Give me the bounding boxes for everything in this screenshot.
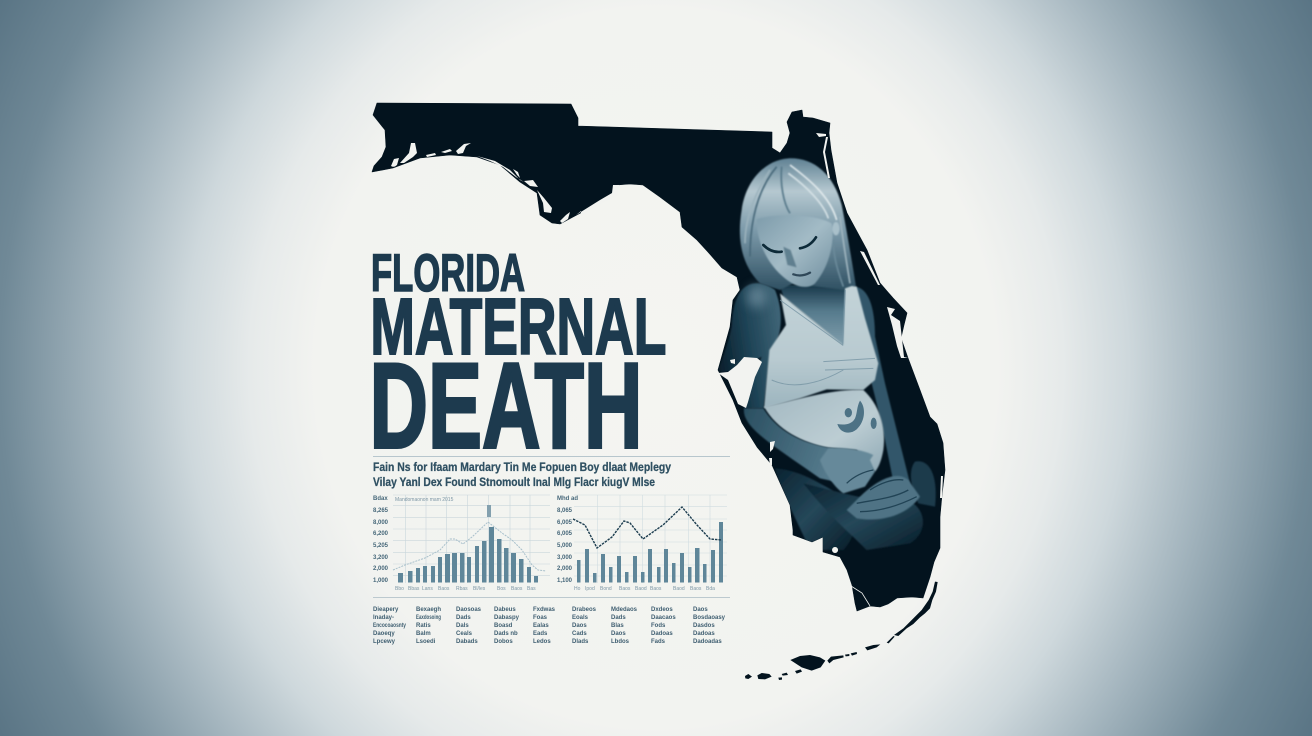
map: west coast gaps bbox=[718, 357, 838, 553]
title bbox=[370, 244, 666, 474]
data table: Dads bbox=[611, 615, 626, 621]
right chart: y axis labels: 1,100 bbox=[557, 578, 573, 584]
title: FLORIDA bbox=[371, 244, 525, 303]
left chart: trend line bbox=[393, 522, 546, 571]
photo: pregnant woman bbox=[718, 158, 936, 550]
left chart: y axis labels: Bdax bbox=[373, 496, 388, 502]
data table: Inaday- bbox=[373, 615, 394, 621]
left chart bbox=[373, 495, 550, 592]
right chart: x axis labels: Ipod bbox=[585, 586, 595, 592]
left chart: y axis labels: 8,000 bbox=[373, 520, 389, 526]
data table: Daos bbox=[572, 623, 587, 629]
data table: Dobos bbox=[494, 639, 513, 645]
title: DEATH bbox=[370, 338, 642, 474]
data table: Daos bbox=[611, 631, 626, 637]
left chart: y axis labels: 1,000 bbox=[373, 578, 389, 584]
data table: Dabaspy bbox=[494, 615, 520, 621]
data table: Dieapery bbox=[373, 607, 399, 613]
right chart: x axis labels: Ho bbox=[574, 586, 581, 592]
map: east coast inlets bbox=[816, 133, 943, 498]
data table: Lpcewy bbox=[373, 639, 396, 645]
left chart: x axis labels: Bas bbox=[527, 586, 536, 592]
woman: tank top bbox=[764, 286, 878, 408]
woman: hair bbox=[740, 158, 856, 290]
woman: hands bbox=[820, 448, 920, 520]
right chart: y axis labels: 8,065 bbox=[557, 508, 573, 514]
data table: Dxdeos bbox=[651, 607, 673, 613]
woman: shoulder highlight bbox=[747, 285, 767, 308]
data table: Daacaos bbox=[651, 615, 676, 621]
data table: Dlads bbox=[572, 639, 589, 645]
left chart: bars bbox=[398, 527, 538, 582]
data table: Ceals bbox=[456, 631, 473, 637]
woman: facial features bbox=[763, 237, 816, 276]
right chart: y axis labels: 6,005 bbox=[557, 531, 573, 537]
data table: Bexaegh bbox=[416, 607, 441, 613]
right chart: y axis labels: Mhd ad bbox=[557, 496, 578, 502]
left chart: grid bbox=[393, 495, 550, 583]
data table: Blas bbox=[611, 623, 624, 629]
left chart: x axis labels: Baos bbox=[511, 586, 523, 592]
data table: Eoals bbox=[572, 615, 589, 621]
data table: Mdedaos bbox=[611, 607, 638, 613]
data table: Ledos bbox=[533, 639, 551, 645]
right chart: x axis labels: Baos bbox=[650, 586, 662, 592]
left chart: y axis labels: 8,265 bbox=[373, 508, 389, 514]
data table: Ealas bbox=[533, 623, 549, 629]
left chart: x axis labels: Bl/les bbox=[473, 586, 486, 592]
Florida map silhouette bbox=[372, 103, 945, 680]
data table: Fods bbox=[651, 623, 666, 629]
woman: lap and legs bbox=[775, 461, 936, 550]
woman: finger lines bbox=[847, 470, 917, 512]
right chart: x axis labels bbox=[574, 586, 715, 592]
data table: Dadoas bbox=[693, 631, 715, 637]
left chart: caption: Mandomaonon mam 2015 bbox=[395, 497, 454, 503]
data table: Dadoadas bbox=[693, 639, 722, 645]
right chart: trend line bbox=[573, 507, 722, 548]
left chart: x axis labels: Baos bbox=[438, 586, 450, 592]
data table: Dads bbox=[456, 615, 471, 621]
data table: Cads bbox=[572, 631, 587, 637]
data table: Daos bbox=[693, 607, 708, 613]
map: gulf coast inlets bbox=[391, 143, 619, 223]
right chart: x axis labels: Baos bbox=[690, 586, 702, 592]
data table: Boasd bbox=[494, 623, 513, 629]
right chart: bars bbox=[577, 522, 723, 582]
data table: Daosoas bbox=[456, 607, 482, 613]
left chart: x axis labels: Bbas bbox=[408, 586, 420, 592]
data table: Ratis bbox=[416, 623, 431, 629]
woman: top gathers bbox=[772, 290, 875, 385]
right chart: y axis labels: 2,000 bbox=[557, 566, 573, 572]
data table: Eaxdosoing bbox=[416, 615, 441, 621]
left chart: y axis labels bbox=[373, 496, 389, 584]
left chart: y axis labels: 2,000 bbox=[373, 566, 389, 572]
map: south tip lines bbox=[851, 586, 870, 606]
left chart: peak marker bbox=[487, 505, 491, 517]
right chart: grid bbox=[574, 495, 727, 583]
data table: Dabads bbox=[456, 639, 478, 645]
left chart: y axis labels: 3,200 bbox=[373, 555, 389, 561]
data table: Dabeus bbox=[494, 607, 516, 613]
right chart: y axis labels: 5,000 bbox=[557, 543, 573, 549]
woman: belly bbox=[764, 390, 884, 472]
title: MATERNAL bbox=[370, 282, 666, 371]
woman: upper left arm bbox=[718, 283, 781, 408]
data table: Dads nb bbox=[494, 631, 518, 637]
bottom divider bbox=[373, 597, 730, 598]
right chart: x axis labels: Baod bbox=[635, 586, 647, 592]
woman: belly mark bbox=[837, 401, 877, 433]
data table: Drabeos bbox=[572, 607, 597, 613]
data table: Encocoaosnty bbox=[373, 623, 407, 629]
subtitle text block bbox=[373, 456, 730, 489]
woman: right arm bbox=[855, 287, 910, 490]
right chart: x axis labels: Bond bbox=[600, 586, 612, 592]
woman: ear bbox=[832, 222, 840, 235]
map: Florida Keys bbox=[745, 582, 938, 680]
data table: Dals bbox=[456, 623, 469, 629]
subtitle text block: Fain Ns for Ifaam Mardary Tin Me Fopuen Boy dlaat Meplegy bbox=[373, 460, 671, 474]
right chart: y axis labels bbox=[557, 496, 578, 584]
left chart: x axis labels: Bos bbox=[497, 586, 506, 592]
right chart: y axis labels: 6,005 bbox=[557, 520, 573, 526]
left chart: x axis labels: Lans bbox=[422, 586, 433, 592]
data table: Bosdaoasy bbox=[693, 615, 726, 621]
data table: Dadoas bbox=[651, 631, 673, 637]
left chart: y axis labels: 6,200 bbox=[373, 531, 389, 537]
woman: face bbox=[757, 215, 840, 287]
right chart: y axis labels: 3,000 bbox=[557, 555, 573, 561]
subtitle text block: Vilay Yanl Dex Found Stnomoult Inal Mlg Flacr kiugV Mlse bbox=[373, 475, 655, 489]
right chart: x axis labels: Bda bbox=[706, 586, 715, 592]
woman: nose shadow bbox=[783, 247, 797, 267]
left chart: y axis labels: 5,205 bbox=[373, 543, 389, 549]
data table bbox=[373, 607, 726, 645]
right chart bbox=[557, 495, 727, 592]
data table: Dasdos bbox=[693, 623, 715, 629]
right chart: x axis labels: Baod bbox=[673, 586, 685, 592]
data table: Fxdwas bbox=[533, 607, 556, 613]
data table: Lsoedi bbox=[416, 639, 436, 645]
data table: Eads bbox=[533, 631, 548, 637]
data table: Daoeqy bbox=[373, 631, 395, 637]
woman: chest bbox=[781, 284, 846, 346]
data table: Fads bbox=[651, 639, 666, 645]
left chart: x axis labels bbox=[395, 586, 536, 592]
left chart: x axis labels: Bbo bbox=[395, 586, 404, 592]
woman: forearm bbox=[743, 408, 832, 482]
woman: hair streaks bbox=[745, 165, 850, 287]
data table: Lbdos bbox=[611, 639, 630, 645]
left chart: x axis labels: Rbas bbox=[456, 586, 468, 592]
data table: Balm bbox=[416, 631, 431, 637]
right chart: x axis labels: Baos bbox=[619, 586, 631, 592]
data table: Foas bbox=[533, 615, 548, 621]
